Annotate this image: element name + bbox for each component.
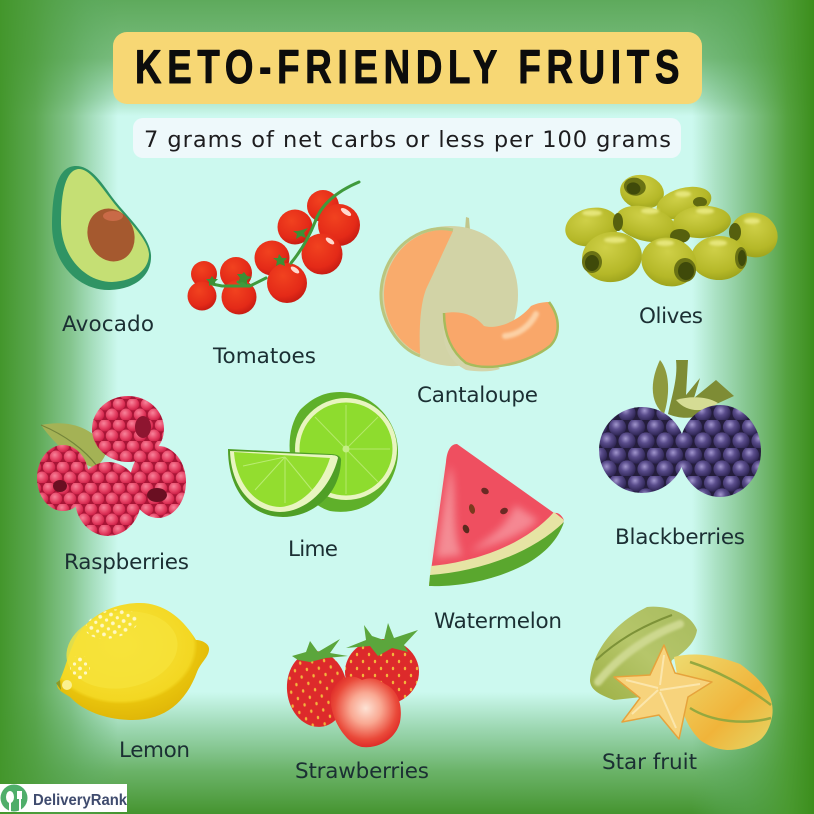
fruit: tomatoes <box>188 182 360 314</box>
subtitle pill <box>133 118 681 158</box>
label: Raspberries: Raspberries <box>64 550 189 575</box>
fruit: raspberries <box>37 396 186 536</box>
fruit: blackberries <box>599 360 761 497</box>
label: Lime: Lime <box>288 537 338 562</box>
label: Cantaloupe: Cantaloupe <box>417 383 538 408</box>
title text: KETO-FRIENDLY FRUITS <box>135 41 679 93</box>
label: Lemon: Lemon <box>119 738 190 763</box>
fruit: lemon <box>56 603 209 720</box>
icon: logo mark <box>0 784 28 812</box>
label: Olives: Olives <box>639 304 703 329</box>
logo text: DeliveryRank <box>33 792 127 809</box>
title banner <box>113 32 702 104</box>
label: Strawberries: Strawberries <box>295 759 429 784</box>
fruit: star fruit <box>590 607 773 750</box>
fruit: watermelon <box>429 444 564 586</box>
label: Tomatoes: Tomatoes <box>212 344 316 369</box>
fruit: strawberries <box>283 623 419 747</box>
label: Blackberries: Blackberries <box>615 525 745 550</box>
label: Avocado: Avocado <box>62 312 154 337</box>
fruit: olives <box>562 171 785 293</box>
label: Star fruit: Star fruit <box>602 750 697 775</box>
label: Watermelon: Watermelon <box>434 609 562 634</box>
logo: DeliveryRank <box>0 784 127 812</box>
fruit: lime <box>228 392 398 517</box>
fruit: cantaloupe <box>381 217 558 371</box>
subtitle text: 7 grams of net carbs or less per 100 grams <box>144 127 671 153</box>
fruit: avocado <box>52 166 151 290</box>
